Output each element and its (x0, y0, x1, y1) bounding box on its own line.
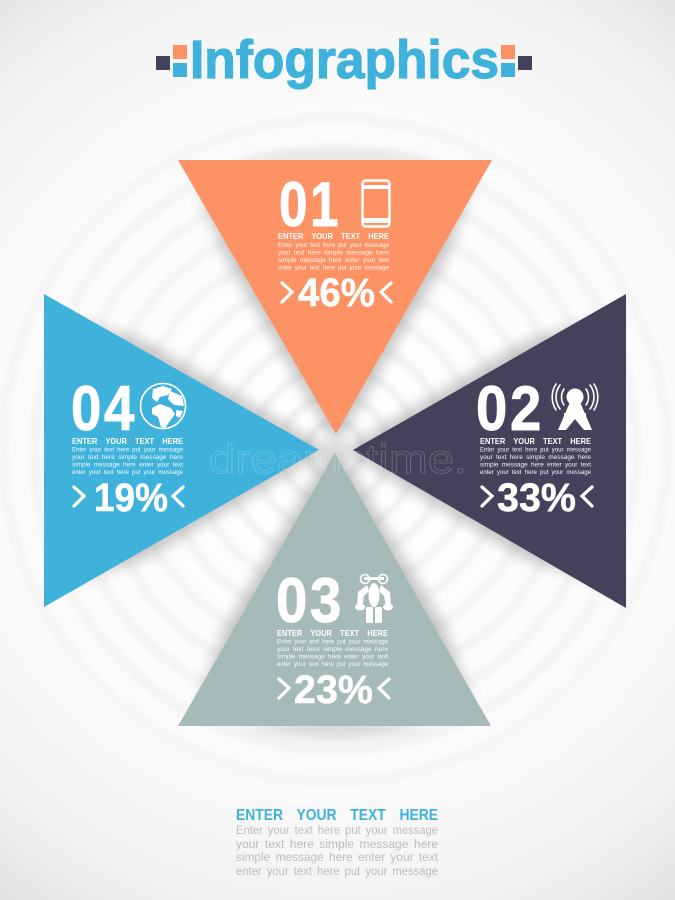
icon: radio tower (552, 384, 598, 430)
bottom body text (236, 825, 439, 878)
orange triangle (178, 160, 492, 434)
icon: smartphone (362, 180, 390, 226)
percentage 23%: 23% (294, 668, 373, 712)
panel 02: navy (353, 294, 626, 608)
text block (278, 231, 389, 272)
bottom body text: simple message here enter your text (236, 852, 439, 864)
title text: Infographics (190, 30, 499, 90)
text block: simple message here enter your text (72, 462, 183, 468)
blue triangle (44, 294, 319, 607)
text block: simple message here enter your text (278, 257, 389, 264)
text block: simple message here enter your text (277, 654, 388, 660)
text block (480, 436, 591, 476)
panel 03: grey-green (178, 453, 491, 726)
text block: enter your text here put your message (278, 264, 389, 272)
text block: Enter your text here put your message (278, 242, 389, 249)
percentage 46%: 46% (298, 271, 375, 315)
number 02: 02 (476, 374, 544, 444)
panel 04: blue (44, 294, 319, 607)
text block: enter your text here put your message (72, 469, 183, 476)
text block: your text here simple message here (480, 454, 591, 461)
icon: globe (140, 384, 186, 428)
number 03: 03 (276, 566, 344, 636)
text block: your text here simple message here (277, 646, 388, 653)
background concentric rings (3, 118, 667, 782)
text block: your text here simple message here (72, 454, 183, 461)
percentage 19%: 19% (94, 476, 168, 520)
percentage 33%: 33% (497, 476, 576, 520)
title decoration left (156, 45, 187, 77)
number 01: 01 (279, 170, 341, 240)
bottom body text: your text here simple message here (236, 839, 438, 851)
text block (277, 628, 388, 668)
text block (72, 436, 183, 476)
text block: ENTER YOUR TEXT HERE (72, 436, 183, 446)
number 04: 04 (71, 374, 137, 444)
text block: Enter your text here put your message (480, 446, 591, 454)
icon: robot (355, 574, 393, 623)
triangle shadows (70, 156, 600, 735)
bottom body text: Enter your text here put your message (236, 825, 438, 837)
title decoration right (501, 45, 532, 77)
text block: ENTER YOUR TEXT HERE (480, 436, 591, 446)
text block: your text here simple message here (278, 250, 389, 256)
text block: ENTER YOUR TEXT HERE (278, 231, 389, 241)
text block: simple message here enter your text (480, 462, 591, 468)
bottom body text: enter your text here put your message (236, 866, 438, 878)
text block: Enter your text here put your message (72, 446, 183, 454)
text block: enter your text here put your message (277, 661, 388, 668)
grey-green triangle (178, 453, 491, 726)
text block: Enter your text here put your message (277, 638, 388, 646)
panel 01: orange (178, 160, 492, 434)
text block: enter your text here put your message (480, 469, 591, 476)
title (156, 30, 532, 90)
watermark: dreamstime. (209, 436, 467, 482)
navy triangle (353, 294, 626, 608)
bottom text block (236, 807, 439, 878)
text block: ENTER YOUR TEXT HERE (277, 628, 388, 638)
bottom heading: ENTER YOUR TEXT HERE (236, 807, 438, 824)
